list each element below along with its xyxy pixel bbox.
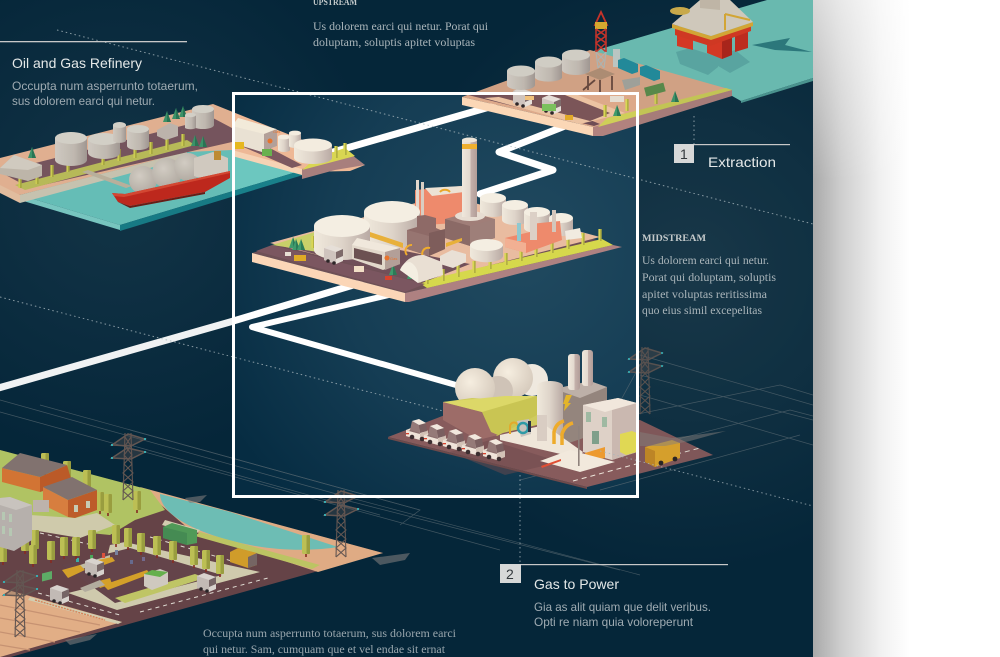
icon: lightning bolt [563, 395, 572, 411]
pavement block [62, 542, 260, 610]
text block: midstream: MIDSTREAM [642, 234, 706, 244]
text block: downstream paragraph: Occupta num asperrunto totaerum, sus dolorem earci [203, 628, 456, 640]
ground [388, 415, 713, 489]
text block: upstream: Us dolorem earci qui netur. Porat qui [313, 21, 488, 33]
white pipeline routes [0, 106, 565, 389]
white tank and gray hall [537, 350, 607, 445]
callout: 2 gas to power: Opti re niam quia voloreperunt [534, 615, 694, 629]
hill [443, 396, 537, 440]
water basin [20, 147, 303, 231]
scene: town and waste facility [0, 450, 383, 657]
upstream tanks [507, 50, 590, 90]
teal cabins [618, 58, 666, 96]
refinery platform [0, 104, 365, 203]
gas warehouse [352, 238, 400, 270]
large tanks [314, 201, 420, 260]
callout: 2 gas to power: 2 [506, 566, 514, 582]
callout: 1 extraction: 1 [680, 146, 688, 162]
plane boundary dotted lines [0, 30, 813, 563]
arched hangar [400, 255, 443, 283]
text block: upstream [313, 0, 488, 49]
label: oil and gas refinery [0, 41, 198, 108]
parked cars [406, 419, 505, 461]
text block: midstream: Us dolorem earci qui netur. [642, 255, 769, 267]
base platform [462, 50, 732, 136]
storage tanks [55, 105, 214, 166]
waste skips [62, 557, 150, 590]
page shadow [813, 0, 910, 657]
low tank [470, 239, 503, 262]
inner tanks [278, 131, 332, 164]
ground shadow smudges [65, 495, 410, 645]
gas warehouse: Gas [390, 256, 397, 261]
callout: 2 gas to power [500, 564, 728, 629]
vehicles [50, 523, 257, 605]
offshore rig [670, 0, 753, 59]
road markings [38, 533, 268, 615]
text block: downstream paragraph: qui netur. Sam, cumquam que et vel endae sit ernat [203, 644, 446, 656]
fence shadow [640, 431, 726, 446]
rig reflection [676, 48, 750, 75]
yellow side unit [620, 431, 637, 455]
signs [42, 550, 145, 582]
apartment block [0, 497, 32, 551]
warehouse and small building [0, 123, 178, 181]
small tanks [480, 193, 573, 236]
wall [80, 580, 105, 592]
callout: 1 extraction: Extraction [708, 154, 776, 170]
gas spheres [455, 358, 548, 400]
label: oil and gas refinery: Occupta num asperrunto totaerum, [12, 79, 198, 93]
callout: 2 gas to power: Gia as alit quiam que delit veribus. [534, 600, 711, 614]
chimney stack [445, 138, 495, 246]
text block: midstream: Porat qui doluptam, soluptis [642, 272, 777, 284]
base [0, 450, 383, 657]
rig shadow [752, 38, 812, 52]
house rear [2, 453, 72, 492]
warehouse gas: Gas [273, 129, 280, 134]
bay water [160, 494, 338, 550]
callout: 1 extraction [674, 144, 790, 170]
orange building rear [415, 180, 462, 224]
drilling derrick [583, 12, 620, 94]
tanker ship [112, 151, 230, 208]
front sand lot [0, 588, 122, 657]
scene: upstream extraction [462, 0, 813, 136]
text block: upstream: doluptam, soluptis apitet voluptas [313, 37, 476, 49]
delivery van [645, 440, 680, 467]
trees [0, 453, 310, 577]
quay strip [195, 532, 320, 569]
brown stepped building [405, 215, 445, 258]
orange building front [505, 210, 582, 253]
small white building [440, 250, 466, 268]
frame highlight background [232, 92, 639, 498]
white focus frame [234, 94, 638, 496]
platform [252, 195, 622, 302]
text block: midstream: quo eius simil excepelitas [642, 305, 763, 317]
sand [140, 487, 383, 572]
white building [540, 398, 637, 472]
boiler unit with fan [500, 415, 583, 458]
power lines [0, 355, 813, 575]
callout: 2 gas to power: Gas to Power [534, 576, 619, 592]
green verge [0, 450, 165, 535]
pylons [3, 347, 663, 637]
jetty [82, 170, 132, 188]
text block: downstream paragraph [203, 628, 456, 656]
label: oil and gas refinery: sus dolorem earci qui netur. [12, 94, 155, 108]
pipe rack [370, 232, 403, 248]
text block: midstream: apitet voluptas reritissima [642, 289, 767, 301]
warehouse gas [232, 118, 280, 156]
label: oil and gas refinery: Oil and Gas Refinery [12, 55, 142, 71]
sea plane [590, 0, 813, 101]
house front [33, 477, 97, 518]
scene: gas to power plant [388, 350, 726, 489]
scene: oil and gas refinery with tanker [0, 104, 365, 231]
scene: gas processing plant [252, 138, 622, 302]
orange arches [554, 421, 573, 445]
text block: midstream [642, 234, 777, 317]
